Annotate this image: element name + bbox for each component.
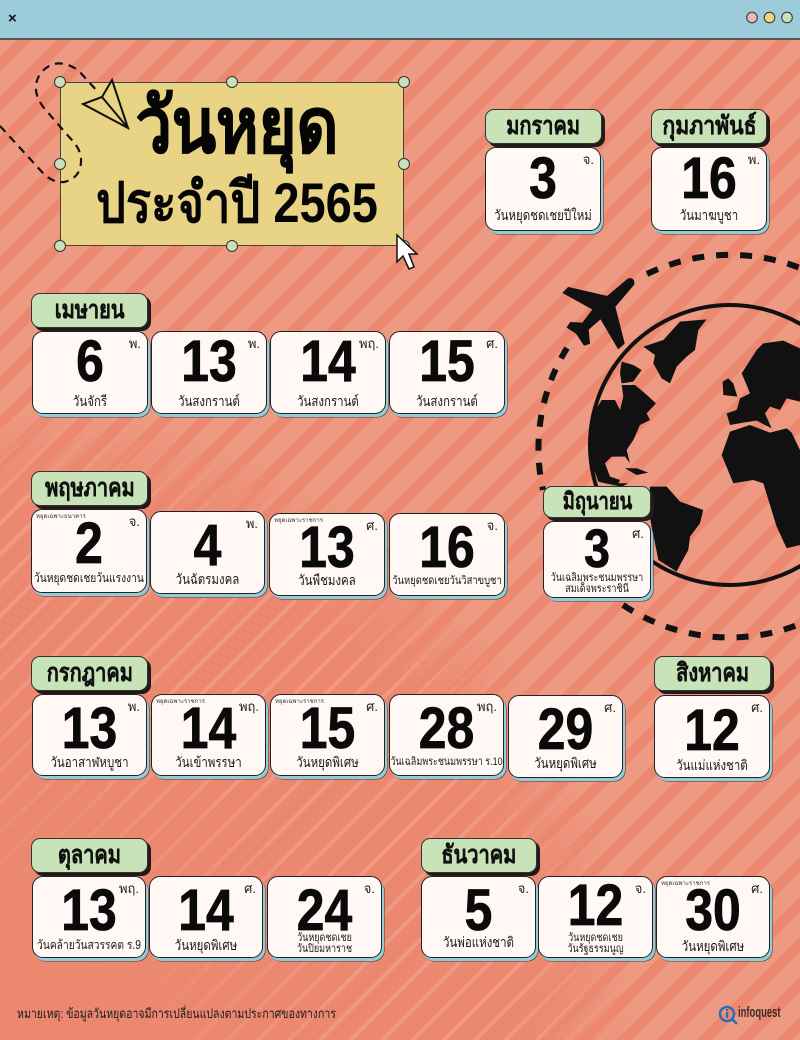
close icon: × — [8, 10, 17, 27]
card: 28 July: 28 — [419, 696, 474, 761]
icon: mouse cursor — [397, 235, 417, 269]
card: 15 April: 15 — [419, 329, 475, 394]
label: April — [31, 293, 148, 328]
card: 13 July: พ. — [128, 699, 140, 714]
card: 14 October: วันหยุดพิเศษ — [175, 937, 237, 953]
card: 3 January: วันหยุดชดเชยปีใหม่ — [494, 207, 592, 223]
card: 6 April: พ. — [129, 336, 141, 351]
label: February — [651, 109, 767, 144]
card: 24 October: วันปิยมหาราช — [297, 943, 352, 955]
card: 15 July: 15 — [300, 696, 355, 761]
globe ring — [590, 305, 800, 585]
card: 29 July: 29 — [538, 697, 593, 762]
card: 15 July: หยุดเฉพาะราชการ — [275, 699, 324, 705]
card: 13 April — [151, 331, 267, 414]
card: 12 December — [538, 876, 653, 958]
card: 14 July: หยุดเฉพาะราชการ — [156, 699, 205, 705]
card: 24 October: จ. — [364, 881, 375, 896]
card: 16 February: 16 — [681, 146, 737, 211]
label: January — [485, 109, 602, 144]
card: 30 December: ศ. — [751, 881, 763, 896]
card: 14 April: วันสงกรานต์ — [297, 393, 359, 409]
card: 14 July: พฤ. — [239, 699, 259, 714]
card: 12 August — [654, 695, 770, 778]
card: 2 May: หยุดเฉพาะธนาคาร — [36, 514, 86, 520]
card: 12 December: วันหยุดชดเชย — [568, 932, 623, 944]
card: 24 October: วันหยุดชดเชย — [297, 932, 352, 944]
handles — [54, 76, 410, 252]
card: 2 May — [31, 509, 147, 593]
card: 13 May — [269, 513, 385, 596]
label: June: มิถุนายน — [562, 488, 632, 514]
card: 12 December: วันรัฐธรรมนูญ — [567, 943, 624, 955]
card: 6 April: วันจักรี — [73, 393, 107, 409]
card: 13 May: หยุดเฉพาะราชการ — [274, 518, 323, 524]
card: 28 July: วันเฉลิมพระชนมพรรษา ร.10 — [390, 756, 503, 768]
label: February: กุมภาพันธ์ — [662, 112, 756, 140]
card: 29 July — [508, 695, 623, 778]
label: June — [543, 486, 651, 518]
card: 13 July: 13 — [62, 696, 117, 761]
card: 6 April: 6 — [76, 329, 104, 394]
card: 5 December: วันพ่อแห่งชาติ — [443, 934, 514, 950]
card: 2 May: วันหยุดชดเชยวันแรงงาน — [34, 571, 144, 585]
label: January: มกราคม — [507, 112, 580, 140]
card: 15 July — [270, 694, 385, 776]
card: 13 October: 13 — [61, 878, 117, 943]
card: 3 June: 3 — [584, 519, 610, 579]
card: 13 July — [32, 694, 147, 776]
card: 2 May: จ. — [129, 514, 140, 529]
card: 13 April: พ. — [248, 336, 260, 351]
card: 13 October — [32, 876, 146, 958]
card: 2 May: 2 — [75, 511, 103, 576]
card: 4 May — [150, 511, 265, 594]
card: 12 December: จ. — [635, 881, 646, 896]
card: 14 October: ศ. — [244, 881, 256, 896]
card: 3 June: ศ. — [632, 526, 644, 541]
label: May — [31, 471, 148, 506]
card: 16 May — [389, 513, 505, 596]
card: 13 October: วันคล้ายวันสวรรคต ร.9 — [37, 938, 141, 952]
card: 16 February — [651, 147, 767, 231]
card: 14 October — [149, 876, 263, 958]
card: 3 January: 3 — [529, 146, 557, 211]
card: 15 July: ศ. — [366, 699, 378, 714]
label: August — [654, 656, 771, 691]
card: 12 August: 12 — [684, 698, 740, 763]
card: 24 October: 24 — [297, 878, 352, 943]
logo: infoquest — [718, 1004, 781, 1025]
card: 16 May: วันหยุดชดเชยวันวิสาขบูชา — [392, 575, 502, 587]
footnote: หมายเหตุ: ข้อมูลวันหยุดอาจมีการเปลี่ยนแปลงตามประกาศของทางการ — [17, 1006, 336, 1021]
card: 24 October — [267, 876, 382, 958]
window buttons — [746, 12, 793, 24]
top window bar — [0, 0, 800, 40]
card: 13 May: ศ. — [366, 518, 378, 533]
card: 14 July — [151, 694, 266, 776]
dashed flight orbit — [538, 255, 800, 637]
label: April: เมษายน — [55, 296, 124, 324]
selection handles, paper plane and cursor — [0, 62, 419, 270]
label: July — [31, 656, 148, 691]
card: 13 October: พฤ. — [119, 881, 139, 896]
card: 12 August: ศ. — [751, 700, 763, 715]
card: 5 December: จ. — [518, 881, 529, 896]
card: 13 May: วันพืชมงคล — [298, 572, 356, 588]
card: 12 December: 12 — [568, 873, 623, 938]
card: 4 May: พ. — [246, 516, 258, 531]
card: 14 July: วันเข้าพรรษา — [175, 754, 242, 770]
icon: paper plane — [83, 80, 128, 128]
card: 5 December — [421, 876, 536, 958]
card: 15 April: ศ. — [486, 336, 498, 351]
label: October: ตุลาคม — [58, 841, 121, 869]
card: 14 April: พฤ. — [359, 336, 379, 351]
card: 15 April: วันสงกรานต์ — [416, 393, 478, 409]
card: 28 July: พฤ. — [477, 699, 497, 714]
card: 29 July: วันหยุดพิเศษ — [534, 755, 597, 771]
continents — [588, 319, 800, 572]
card: 16 February: พ. — [748, 152, 760, 167]
label: May: พฤษภาคม — [45, 474, 134, 502]
card: 14 April: 14 — [300, 329, 356, 394]
icon: magnifier — [718, 1006, 738, 1025]
card: 3 June: สมเด็จพระราชินี — [565, 583, 629, 595]
card: 14 April — [270, 331, 386, 414]
card: 6 April — [32, 331, 148, 414]
card: 16 May: 16 — [419, 515, 475, 580]
card: 3 June: วันเฉลิมพระชนมพรรษา — [551, 572, 643, 584]
card: 14 July: 14 — [181, 696, 236, 761]
title panel — [60, 82, 404, 246]
card: 29 July: ศ. — [604, 700, 616, 715]
card: 13 April: 13 — [181, 329, 237, 394]
card: 4 May: วันฉัตรมงคล — [176, 571, 239, 587]
card: 3 June — [543, 521, 651, 598]
card: 13 April: วันสงกรานต์ — [178, 393, 240, 409]
card: 3 January — [485, 147, 601, 231]
card: 3 January: จ. — [583, 152, 594, 167]
card: 13 May: 13 — [299, 515, 355, 580]
card: 30 December — [656, 876, 770, 958]
card: 15 July: วันหยุดพิเศษ — [296, 754, 359, 770]
wordmark: infoquest — [738, 1004, 781, 1021]
card: 16 May: จ. — [487, 518, 498, 533]
card: 16 February: วันมาฆบูชา — [680, 207, 738, 223]
card: 30 December: 30 — [685, 878, 741, 943]
card: 5 December: 5 — [465, 878, 492, 943]
card: 13 July: วันอาสาฬหบูชา — [50, 754, 129, 770]
card: 30 December: วันหยุดพิเศษ — [682, 938, 744, 954]
label: August: สิงหาคม — [676, 659, 749, 687]
card: 15 April — [389, 331, 505, 414]
card: 28 July — [389, 694, 504, 776]
subtitle: ประจำปี 2565 — [96, 171, 378, 234]
card: 12 August: วันแม่แห่งชาติ — [676, 757, 748, 773]
icon: airplane — [563, 279, 634, 348]
label: October — [31, 838, 148, 873]
card: 4 May: 4 — [194, 513, 221, 578]
card: 14 October: 14 — [178, 878, 234, 943]
title heading: วันหยุด — [136, 84, 338, 169]
label: July: กรกฎาคม — [46, 659, 133, 687]
dashed plane trail — [0, 63, 98, 182]
label: December — [421, 838, 537, 873]
label: December: ธันวาคม — [442, 841, 516, 869]
card: 30 December: หยุดเฉพาะราชการ — [661, 881, 710, 887]
